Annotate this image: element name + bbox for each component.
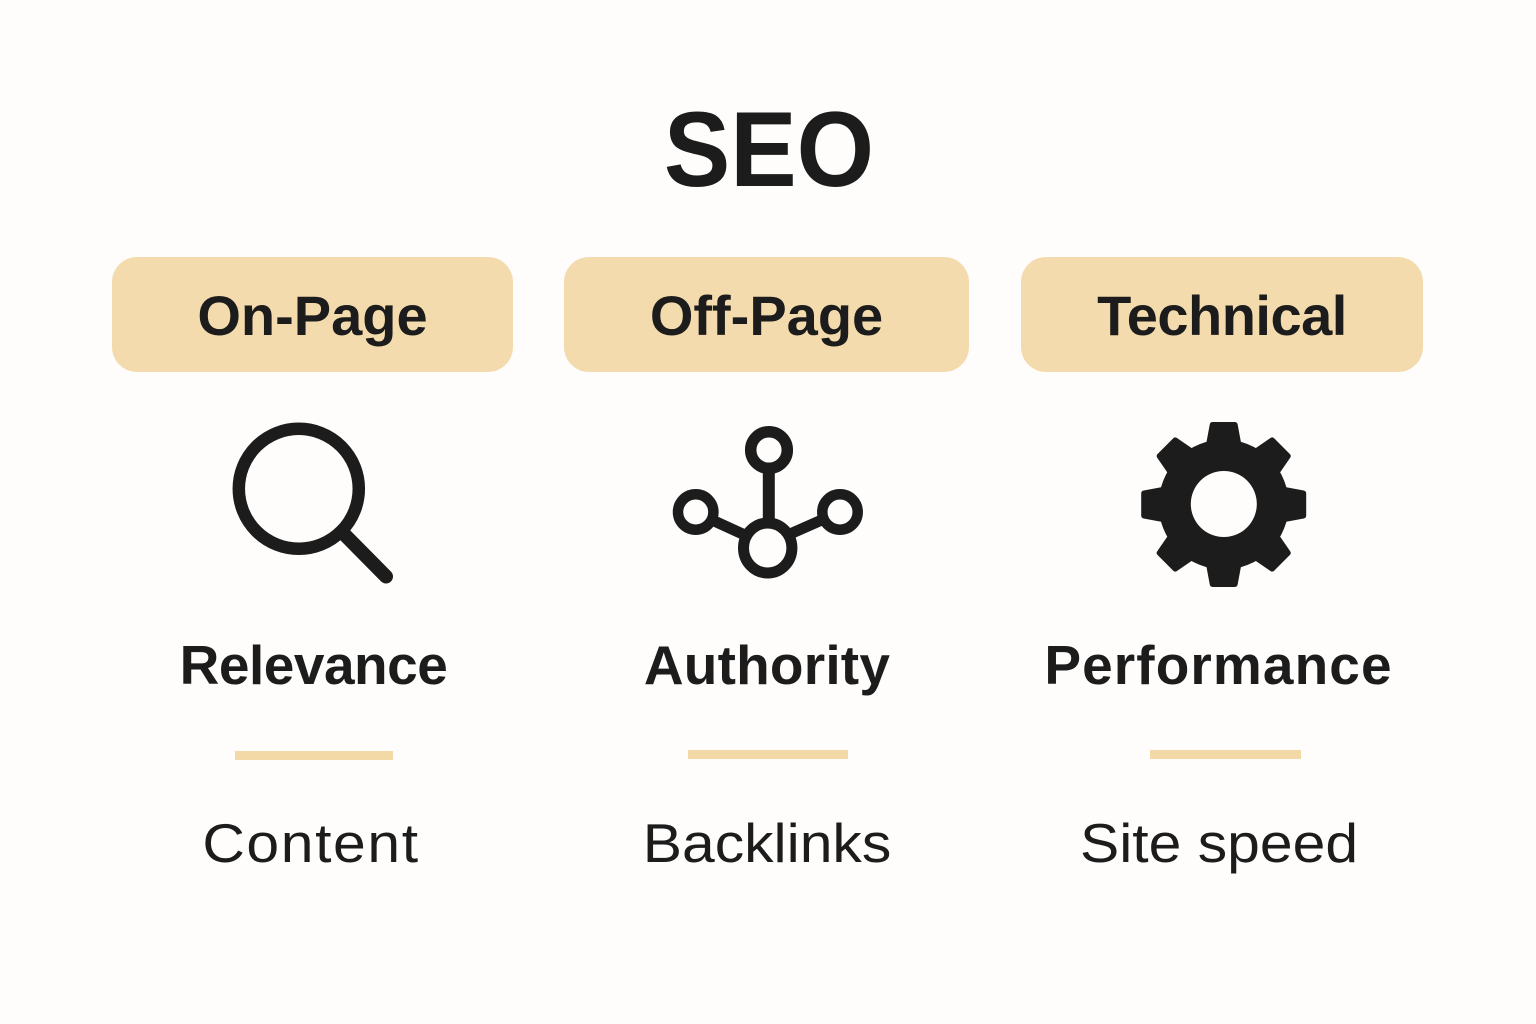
- text: Backlinks: Backlinks: [643, 812, 891, 874]
- panel: Technical label: Technical: [1097, 284, 1347, 347]
- panel: On-Page label: On-Page: [197, 284, 428, 347]
- heading: Performance: Performance: [1044, 634, 1393, 696]
- icon: network nodes: [672, 426, 863, 578]
- panel: Off-Page label: [564, 257, 969, 372]
- heading: Relevance: Relevance: [180, 634, 447, 696]
- title: SEO: [663, 89, 874, 209]
- heading: Authority: Authority: [644, 634, 890, 696]
- text: Content: Content: [202, 812, 420, 874]
- text: Site speed: Site speed: [1079, 812, 1358, 874]
- panel: Technical label: [1021, 257, 1423, 372]
- icon: magnifying glass: [232, 422, 393, 584]
- icon: gear: [1141, 422, 1306, 587]
- panel: Off-Page label: Off-Page: [650, 284, 883, 347]
- panel: On-Page label: [112, 257, 513, 372]
